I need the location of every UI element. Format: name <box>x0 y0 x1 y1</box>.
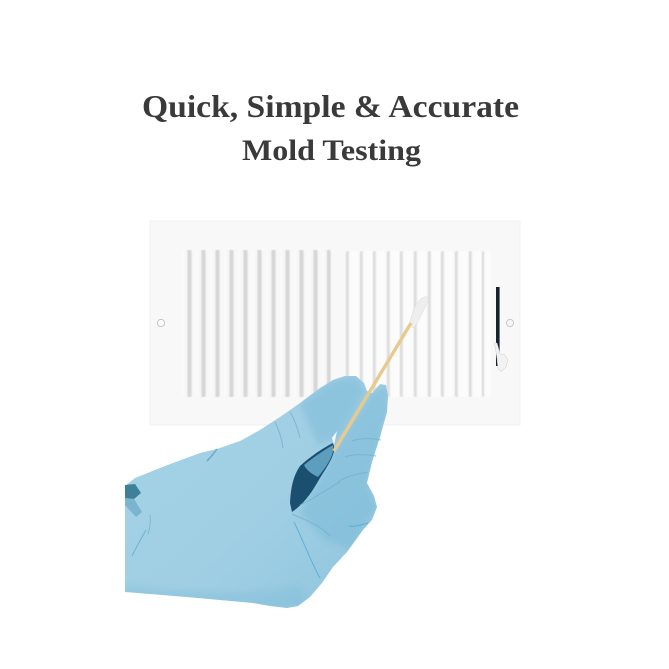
palm underside shading <box>126 586 305 608</box>
gloved hand <box>125 376 388 610</box>
inner shadow highlight <box>304 445 333 477</box>
shading clipped to the glove <box>125 376 388 610</box>
glove silhouette <box>125 376 388 608</box>
swab stick <box>334 323 411 451</box>
cotton swab tip <box>409 297 428 328</box>
screw hole: right <box>506 319 514 327</box>
thumb shading <box>300 385 388 550</box>
white gap between thumb and finger <box>332 431 337 445</box>
left slats <box>182 250 331 397</box>
cuff fold shadow <box>125 484 141 499</box>
title <box>142 88 519 167</box>
heading: line 1: Quick, Simple & Accurate <box>142 88 519 124</box>
heading: line 2: Mold Testing <box>242 134 421 167</box>
thumb creases and folds <box>132 412 381 578</box>
vent plate <box>150 221 520 425</box>
right slats <box>346 251 491 397</box>
screw hole: left <box>157 319 165 327</box>
air vent grille <box>150 221 520 425</box>
damper lever <box>494 343 508 372</box>
shadow between thumb and finger <box>290 443 334 512</box>
cuff fold light <box>125 498 142 517</box>
index finger shading <box>300 376 366 445</box>
damper slot <box>496 287 500 366</box>
